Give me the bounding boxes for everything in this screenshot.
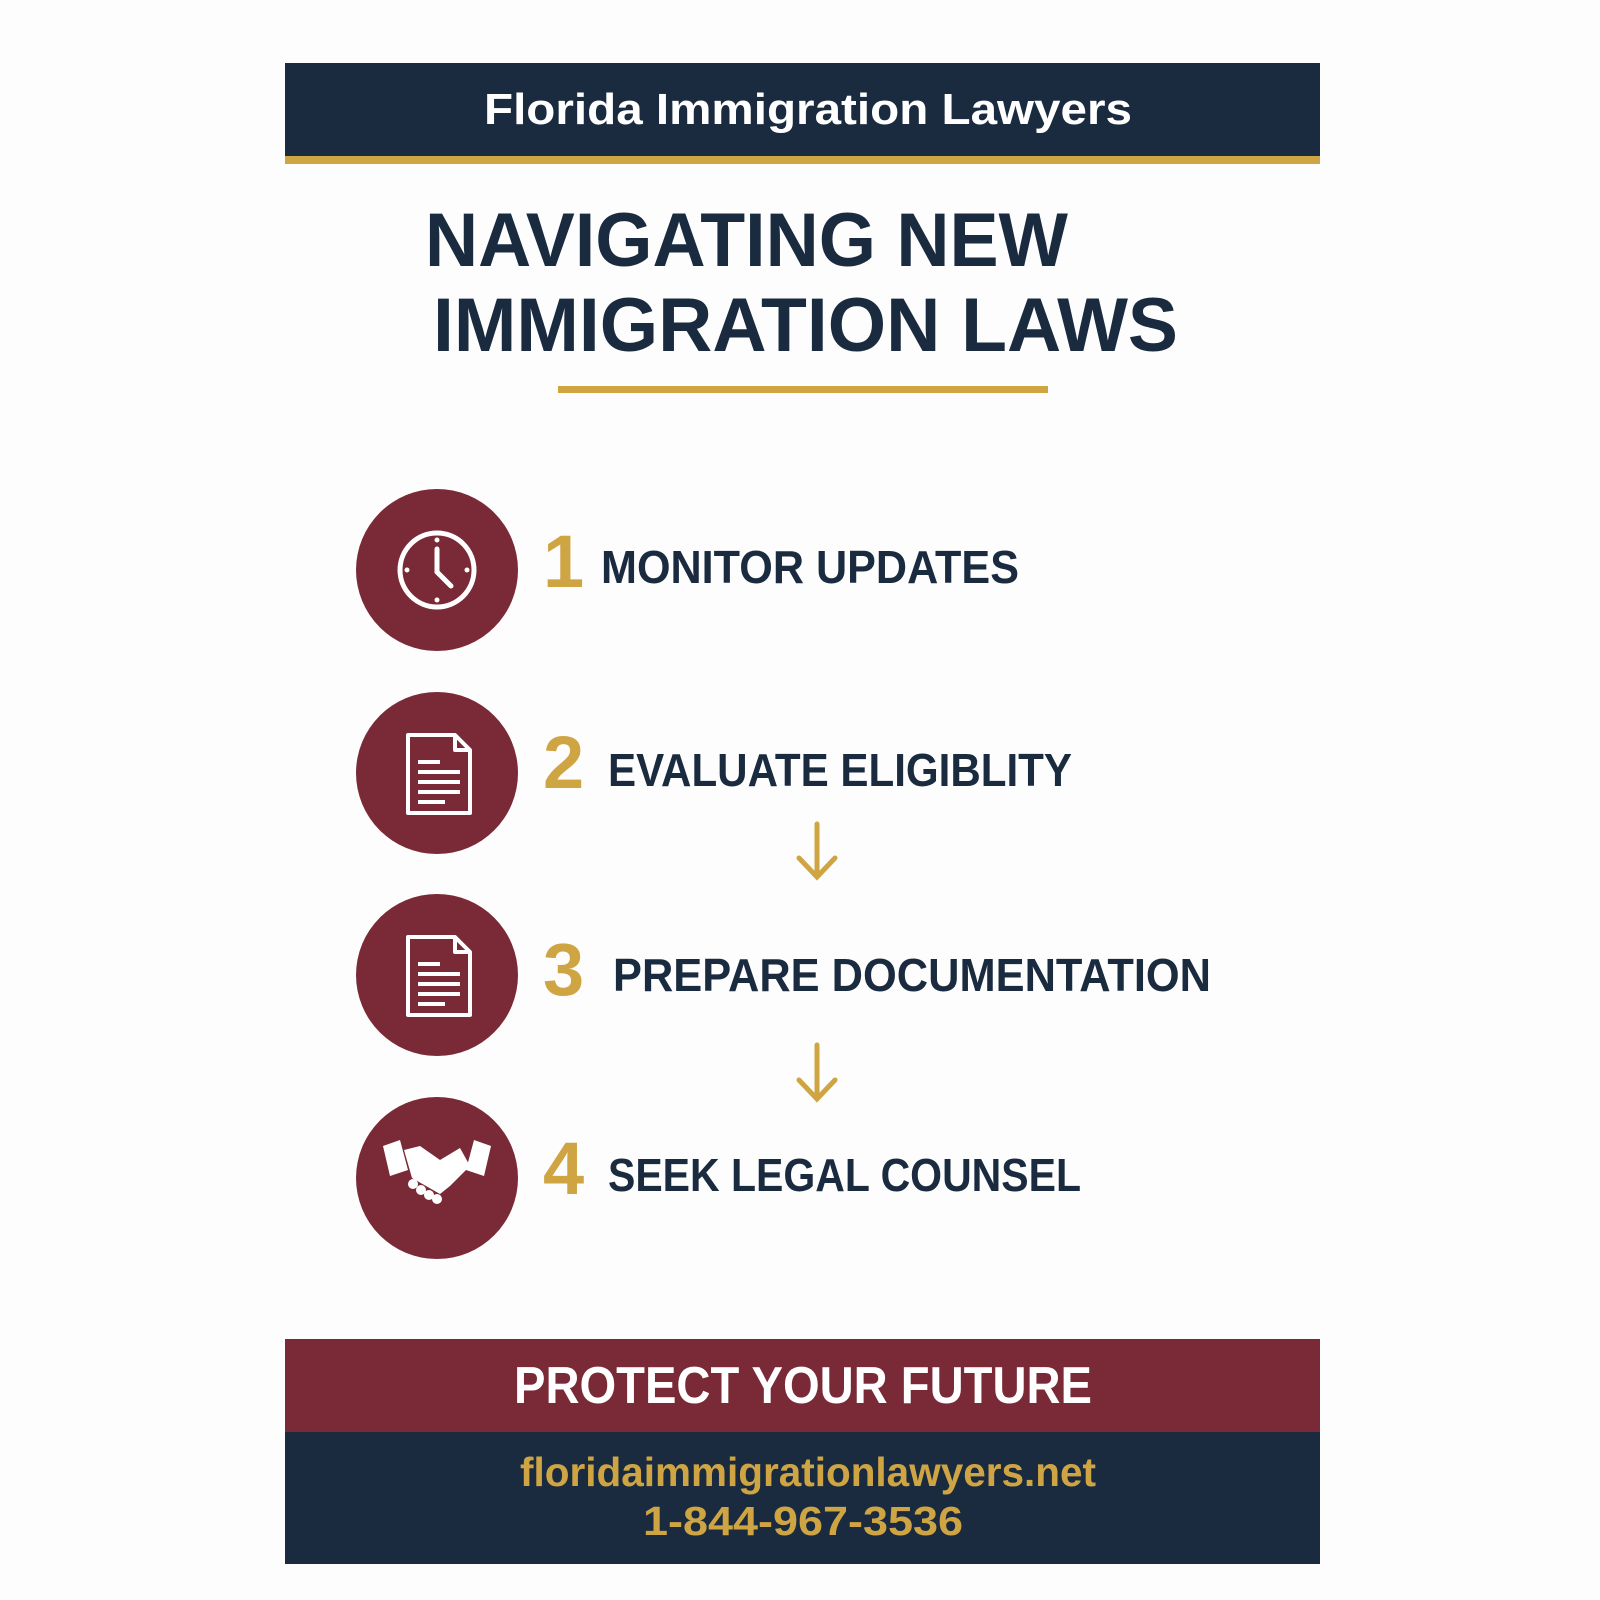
step 1: monitor updates [356, 489, 1019, 651]
icon: handshake [383, 1140, 491, 1204]
step 1: monitor updates: 1 [543, 520, 584, 603]
header bar [285, 63, 1320, 164]
step 3: prepare documentation [356, 894, 1211, 1056]
step 2: evaluate eligibility: 2 [543, 721, 584, 804]
footer banner: protect your future [285, 1339, 1320, 1433]
step 2: evaluate eligibility [356, 692, 1072, 854]
header text: Florida Immigration Lawyers [484, 85, 1132, 134]
footer banner: protect your future: PROTECT YOUR FUTURE [514, 1357, 1092, 1415]
step 4: seek legal counsel: 4 [543, 1127, 584, 1210]
title underline [558, 386, 1048, 393]
step 1: monitor updates: MONITOR UPDATES [601, 541, 1019, 593]
step 4: seek legal counsel: SEEK LEGAL COUNSEL [608, 1149, 1081, 1201]
step 4: seek legal counsel [356, 1097, 1081, 1259]
step 2: evaluate eligibility: EVALUATE ELIGIBLITY [608, 744, 1072, 796]
footer contact panel: floridaimmigrationlawyers.net [520, 1449, 1096, 1495]
title: NAVIGATING NEW [425, 198, 1068, 283]
footer contact panel [285, 1432, 1320, 1564]
footer contact panel: 1-844-967-3536 [643, 1498, 963, 1544]
step 3: prepare documentation: PREPARE DOCUMENTATION [613, 949, 1211, 1001]
title [425, 198, 1178, 368]
icon: document [408, 937, 470, 1015]
arrow 1 [799, 824, 835, 877]
title: IMMIGRATION LAWS [433, 283, 1178, 368]
arrow 2 [799, 1045, 835, 1099]
step 3: prepare documentation: 3 [543, 928, 584, 1011]
icon: document [408, 735, 470, 813]
icon: clock [400, 533, 474, 607]
